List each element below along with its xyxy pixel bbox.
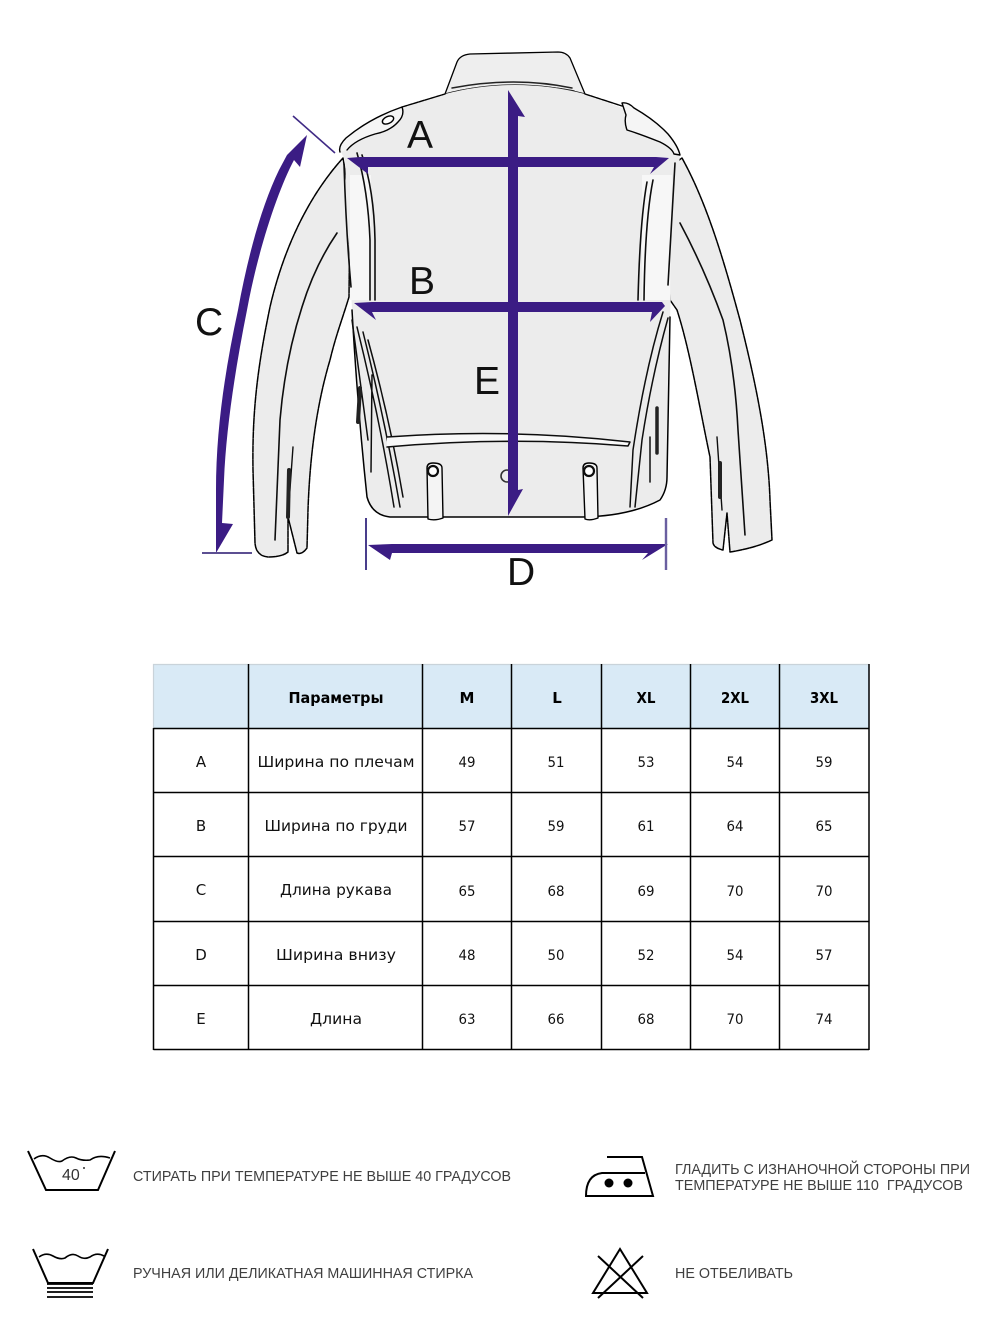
- row C: [196, 881, 832, 900]
- left cuff zipper pull: [288, 470, 289, 517]
- row B: Ширина по груди: [264, 817, 408, 835]
- label B: B: [409, 260, 435, 303]
- left strap button: [381, 114, 395, 126]
- row B: B: [196, 817, 206, 835]
- table header row: 2XL: [721, 689, 749, 707]
- left sleeve: [253, 158, 350, 557]
- row B: 61: [638, 819, 654, 835]
- icon: iron: [586, 1157, 653, 1196]
- row D: D: [195, 946, 207, 964]
- table header row: Параметры: [288, 689, 384, 707]
- C top tick: [293, 116, 335, 153]
- table top border: [153, 664, 869, 728]
- arrow C: sleeve length: [216, 135, 307, 553]
- row C: 70: [816, 884, 832, 900]
- row E: E: [196, 1010, 206, 1028]
- row A: 51: [548, 755, 564, 771]
- right tab: [583, 463, 598, 520]
- row A: 53: [638, 755, 654, 771]
- row A: 59: [816, 755, 832, 771]
- left zipper: [358, 388, 360, 422]
- jacket body: [340, 85, 680, 517]
- left shoulder strap: [340, 107, 403, 152]
- row C: Длина рукава: [280, 881, 392, 899]
- row A: A: [196, 753, 207, 771]
- table grid: [154, 664, 869, 1050]
- C bottom tick: [202, 552, 252, 554]
- row C: C: [196, 881, 206, 899]
- label E: E: [474, 360, 500, 403]
- jacket drawing: [253, 52, 772, 557]
- row B: 64: [726, 819, 744, 835]
- row E: 70: [726, 1012, 744, 1028]
- row C: 68: [548, 884, 564, 900]
- table header row: XL: [636, 689, 656, 707]
- left cuff zipper: [288, 447, 293, 517]
- row C: 70: [726, 884, 744, 900]
- table header background: [153, 664, 869, 728]
- text: ironing: ТЕМПЕРАТУРЕ НЕ ВЫШЕ 110 ГРАДУСОВ: [675, 1177, 963, 1194]
- icon: no bleach: [593, 1249, 647, 1298]
- row A: 49: [458, 755, 476, 771]
- arrow D: bottom width: [368, 544, 668, 560]
- label A: A: [407, 114, 433, 157]
- right snap: [584, 466, 594, 476]
- row E: [196, 1010, 833, 1028]
- right cuff zipper: [717, 437, 722, 510]
- jacket diagram: [195, 52, 772, 594]
- center snap: [501, 470, 513, 482]
- row E: 74: [816, 1012, 833, 1028]
- row C: 65: [458, 884, 476, 900]
- row D: 52: [638, 948, 654, 964]
- collar band: [452, 82, 574, 91]
- row E: 63: [458, 1012, 476, 1028]
- right sleeve: [670, 158, 772, 552]
- label C: C: [195, 301, 223, 344]
- row B: 65: [816, 819, 832, 835]
- row B: [196, 817, 832, 835]
- size table: [153, 664, 869, 1050]
- icon: wash at 40 degrees: [28, 1151, 115, 1190]
- row D: [195, 946, 832, 964]
- table header row: L: [552, 689, 562, 707]
- text: ironing: ГЛАДИТЬ С ИЗНАНОЧНОЙ СТОРОНЫ ПРИ: [675, 1160, 970, 1178]
- D right tick: [665, 518, 667, 570]
- arrow B: chest width: [354, 302, 665, 322]
- seams and details: [275, 153, 745, 540]
- right cuff zipper pull: [718, 463, 722, 497]
- row D: 54: [726, 948, 744, 964]
- table header row: M: [460, 689, 474, 707]
- row E: 66: [548, 1012, 565, 1028]
- text: no bleach: НЕ ОТБЕЛИВАТЬ: [675, 1265, 793, 1282]
- side panel strips: [350, 175, 672, 300]
- row B: 57: [458, 819, 476, 835]
- table header row: 3XL: [810, 689, 838, 707]
- shoulder stitching: [402, 94, 622, 107]
- icon: gentle wash: [33, 1249, 108, 1297]
- text: gentle wash: РУЧНАЯ ИЛИ ДЕЛИКАТНАЯ МАШИННАЯ СТИРКА: [133, 1265, 473, 1282]
- arrow A: shoulder width: [347, 157, 669, 174]
- row E: 68: [638, 1012, 654, 1028]
- hem yoke: [387, 433, 630, 447]
- left snap: [428, 466, 438, 476]
- collar: [445, 52, 585, 94]
- D left tick: [365, 518, 367, 570]
- row E: Длина: [310, 1010, 362, 1028]
- care instructions: [28, 1151, 970, 1298]
- row A: [196, 753, 832, 771]
- left tab: [427, 463, 443, 520]
- icon: wash at 40 degrees: 40: [62, 1167, 80, 1184]
- row D: Ширина внизу: [276, 946, 396, 964]
- row C: 69: [638, 884, 654, 900]
- row D: 50: [548, 948, 564, 964]
- table header row: [288, 689, 838, 707]
- lower body seams: [352, 312, 668, 507]
- text: wash temperature: СТИРАТЬ ПРИ ТЕМПЕРАТУРЕ НЕ ВЫШЕ 40 ГРАДУСОВ: [133, 1168, 511, 1185]
- measurement arrows: [202, 90, 669, 570]
- label D: D: [507, 551, 535, 594]
- row A: Ширина по плечам: [258, 753, 414, 771]
- arrow E: length: [508, 90, 525, 516]
- row D: 48: [458, 948, 476, 964]
- row D: 57: [816, 948, 832, 964]
- right zipper: [655, 408, 659, 453]
- text: ironing: [675, 1160, 970, 1194]
- right shoulder strap: [622, 103, 680, 155]
- row B: 59: [548, 819, 564, 835]
- body outline: [352, 310, 670, 517]
- row A: 54: [726, 755, 744, 771]
